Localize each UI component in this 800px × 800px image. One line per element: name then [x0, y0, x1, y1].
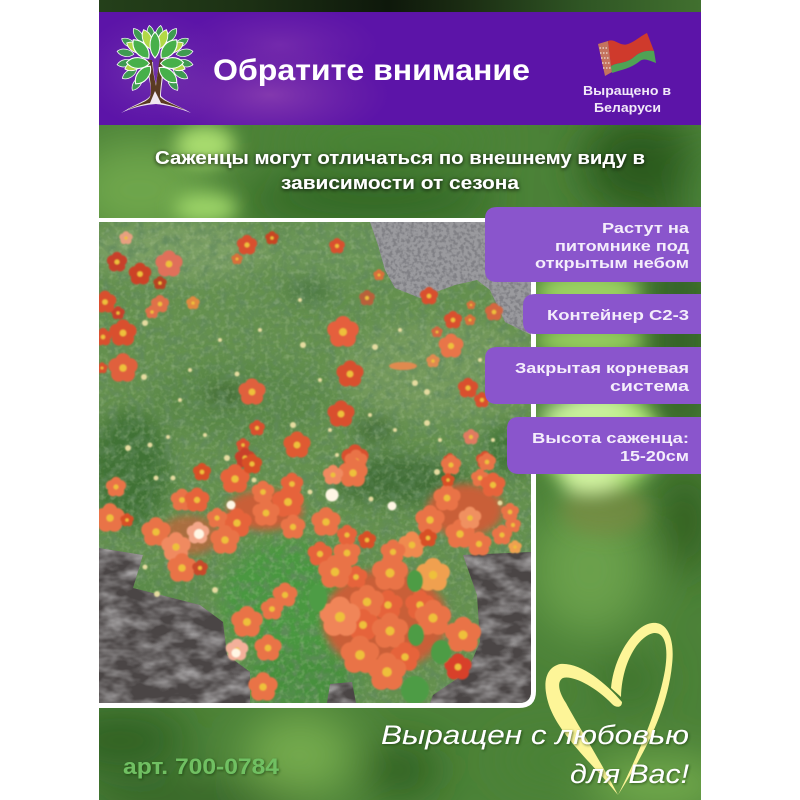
- logo: tree: [116, 25, 194, 113]
- flag caption: [583, 83, 671, 115]
- header banner: [99, 12, 701, 125]
- gravel: [360, 222, 535, 337]
- small flowers and buds: [94, 231, 522, 704]
- info pill: container: [523, 294, 701, 334]
- title: Обратите внимание: [213, 54, 530, 87]
- info pill: closed root system: система: [610, 378, 690, 395]
- photo: potentilla shrub: [90, 220, 540, 710]
- slogan: для Вас!: [570, 759, 690, 789]
- background: blurred green bokeh: [99, 0, 701, 800]
- slogan: Выращен с любовью: [381, 720, 689, 750]
- info pill: seedling height: 15-20см: [620, 448, 689, 465]
- subheading: зависимости от сезона: [281, 173, 520, 193]
- green leaf clusters over flowers: [309, 570, 451, 704]
- orange mass underlay: [160, 484, 503, 670]
- info pill: outdoor nursery: питомнике под: [555, 238, 690, 255]
- info pill: seedling height: [507, 417, 701, 474]
- flag caption: Выращено в: [583, 83, 671, 98]
- slogan: [381, 720, 690, 789]
- info pill: outdoor nursery: [485, 207, 701, 282]
- info pill: outdoor nursery: открытым небом: [535, 255, 689, 272]
- subheading: [155, 148, 645, 193]
- info pill: container: Контейнер С2-3: [547, 307, 689, 324]
- info pill: closed root system: Закрытая корневая: [515, 360, 689, 377]
- subheading: Саженцы могут отличаться по внешнему виду в: [155, 148, 645, 168]
- info pill: seedling height: Высота саженца:: [532, 430, 689, 447]
- info pill: closed root system: [485, 347, 701, 404]
- icon: Belarus flag: [598, 33, 656, 76]
- info pill: outdoor nursery: Растут на: [602, 220, 690, 237]
- icon: yellow heart: [545, 623, 673, 795]
- photo frame: [99, 218, 536, 708]
- bark mulch: [99, 545, 534, 705]
- article number: арт. 700-0784: [123, 754, 280, 779]
- flowers: upper red-orange: [94, 231, 503, 471]
- flowers: lower orange mass: [95, 450, 522, 701]
- flag caption: Беларуси: [594, 100, 661, 115]
